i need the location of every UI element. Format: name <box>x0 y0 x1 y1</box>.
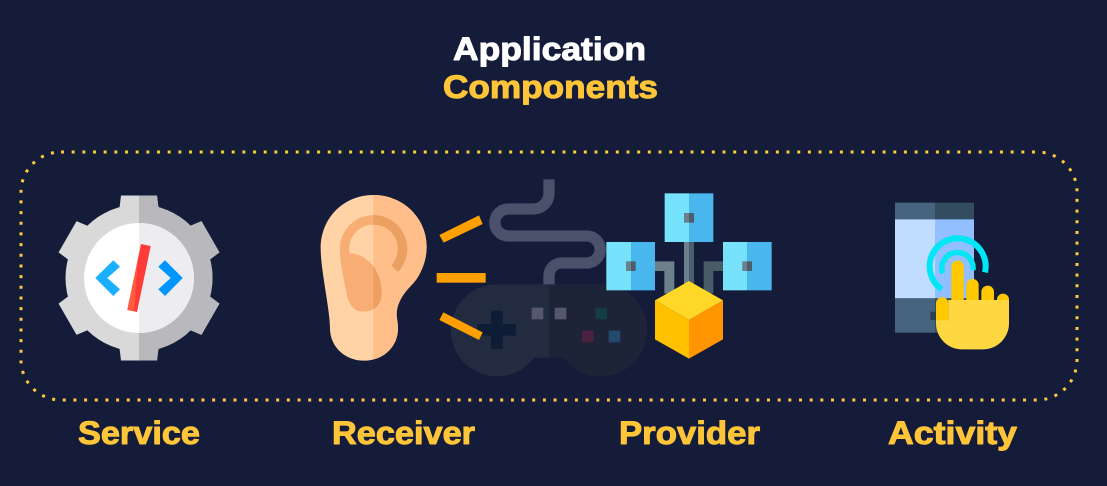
icon: service gear with code symbol <box>58 196 220 360</box>
label: Activity: Activity <box>888 415 1017 451</box>
icon: game controller with cable (faded) <box>451 179 647 376</box>
title: Components <box>443 69 658 105</box>
icon: provider network of blocks and cube <box>606 193 772 359</box>
icon: receiver ear with sound rays <box>321 195 486 361</box>
icon: activity phone with tapping hand <box>895 203 1009 349</box>
label: Receiver: Receiver <box>332 415 475 451</box>
label: Provider: Provider <box>619 415 760 451</box>
title: Application <box>453 31 646 67</box>
dotted rounded border panel <box>21 152 1077 400</box>
title <box>443 31 658 105</box>
label: Service: Service <box>78 415 200 451</box>
